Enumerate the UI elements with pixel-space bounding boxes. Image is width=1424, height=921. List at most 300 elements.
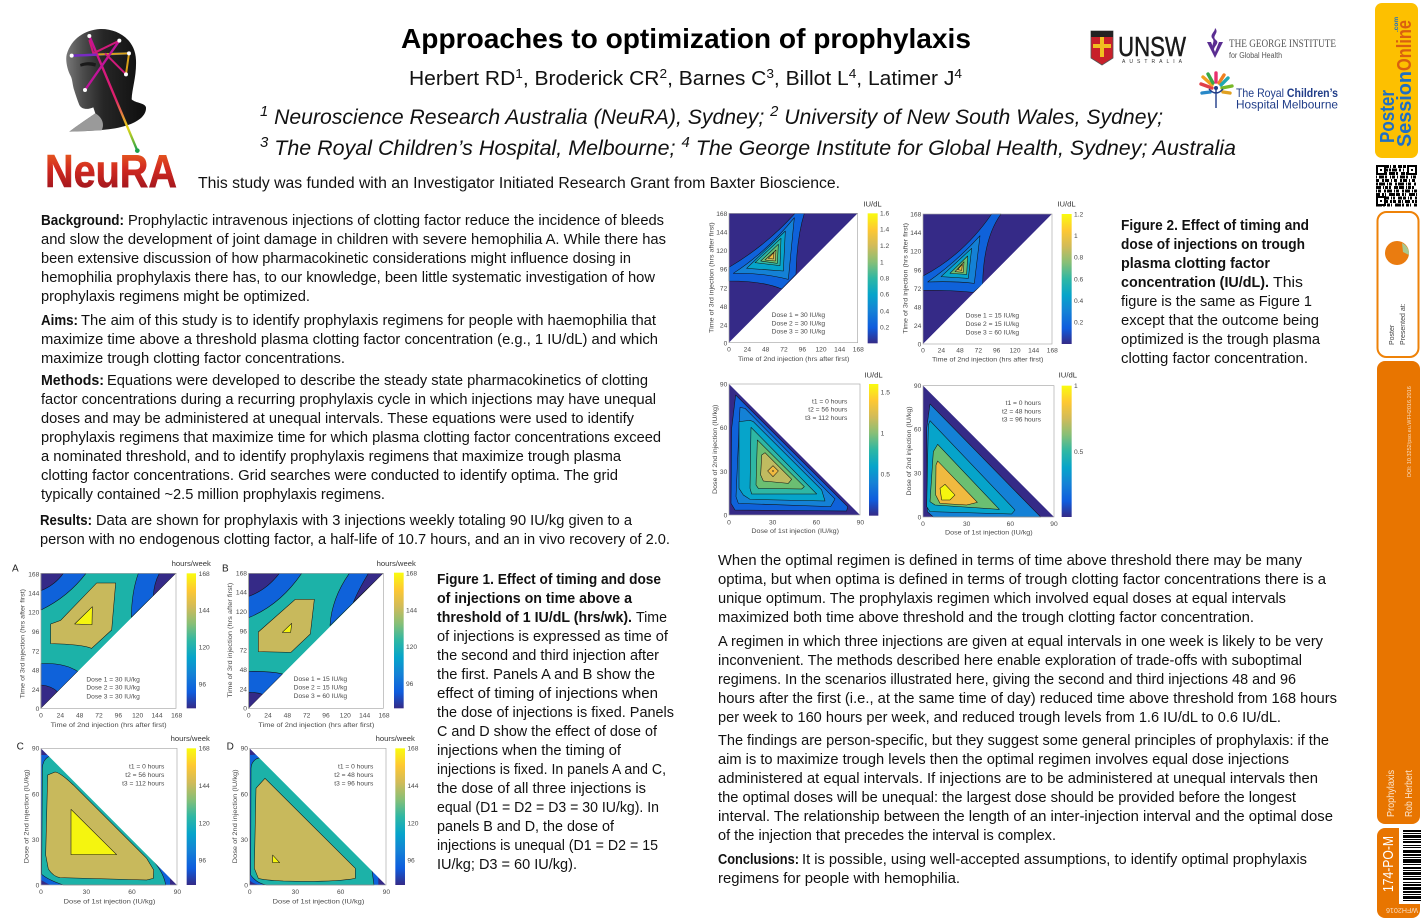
affiliations: 4 <box>681 134 690 151</box>
logo: UNSW: UNSW <box>1118 31 1186 62</box>
text block: discussion paragraph 1 <box>718 553 1327 626</box>
chart: trough panel timing equal dose: Time of 2nd injection (hrs after first) <box>738 356 849 363</box>
chart: panel C: 30 <box>32 837 40 844</box>
chart: panel C: t1 = 0 hours <box>129 764 165 771</box>
chart: panel D: 30 <box>292 889 299 896</box>
text block: discussion paragraph 1: When the optimal regimen is defined in terms of time above threshold there may be many <box>718 553 1303 569</box>
chart: trough panel timing equal dose: 0.6 <box>880 292 890 299</box>
chart: panel B: Time of 3rd injection (hrs after first) <box>227 583 234 698</box>
text block: methods: Methods: <box>41 373 104 389</box>
chart: trough panel timing unequal dose: 0 <box>918 342 922 349</box>
affiliations: Neuroscience Research Australia (NeuRA), Sydney; <box>268 105 770 129</box>
chart: trough panel timing equal dose: 1.6 <box>880 211 890 218</box>
sidebar: poster number and barcode: WFH2016 <box>1386 906 1418 913</box>
chart: trough panel dose unequal dose: 90 <box>1050 521 1058 528</box>
text block: methods: a nominated threshold, and to identify prophylaxis regimens that maximize trough plasma <box>41 449 622 465</box>
chart: trough panel dose unequal dose: Dose of 1st injection (IU/kg) <box>945 530 1033 537</box>
text block: figure 1 caption: C and D show the effect of dose of <box>437 724 658 740</box>
chart: panel B: 0 <box>247 712 251 719</box>
chart: panel C: 120 <box>199 820 210 827</box>
chart: trough panel dose unequal dose: 0.5 <box>1074 449 1084 456</box>
authors: Herbert RD <box>409 68 510 90</box>
logo: The George Institute: for Global Health <box>1229 51 1282 60</box>
chart: trough panel timing equal dose: 144 <box>716 229 728 236</box>
sidebar: poster number and barcode <box>1377 828 1423 918</box>
chart: panel B: 120 <box>406 644 417 651</box>
chart: trough panel timing unequal dose: 0.2 <box>1074 320 1084 327</box>
chart: trough panel timing equal dose: 144 <box>834 347 846 354</box>
text block: discussion paragraph 3: The findings are person-specific, but they suggest some general principles of prophylaxis: if the <box>718 733 1329 749</box>
sidebar: QR code <box>1376 165 1417 206</box>
funding note: This study was funded with an Investigator Initiated Research Grant from Baxter Bioscience. <box>198 175 840 192</box>
chart: trough panel dose unequal dose: 90 <box>914 383 922 390</box>
chart: panel C: C <box>17 741 24 752</box>
chart: panel B: 48 <box>240 667 247 674</box>
chart: panel B: Dose 1 = 15 IU/kg <box>294 676 347 683</box>
chart: panel B: 96 <box>406 681 414 688</box>
text block: methods: prophylaxis regimens that maximize time for which plasma clotting factor concentrations exceed <box>41 430 661 446</box>
chart: panel A: 120 <box>132 712 144 719</box>
sidebar: PosterSessionOnline banner: Online <box>1394 20 1416 71</box>
authors: 2 <box>659 66 667 81</box>
chart: panel B: B <box>222 564 229 575</box>
text block: background: been extensive discussion of how pharmacokinetic considerations might influence dosing in <box>41 251 631 267</box>
logo: The George Institute: THE GEORGE INSTITUTE <box>1229 36 1336 50</box>
text block: results: Data are shown for prophylaxis with 3 injections weekly totaling 90 IU/kg given to a <box>96 513 633 529</box>
sidebar: presented-at box <box>1378 212 1418 357</box>
chart: trough panel timing equal dose: IU/dL <box>863 200 882 209</box>
logo: NeuRA <box>45 29 177 197</box>
sidebar: orange info panel: Prophylaxis <box>1385 770 1397 817</box>
chart: panel A: 168 <box>28 571 40 578</box>
affiliations: 1 <box>260 103 268 120</box>
chart: panel C: 90 <box>174 889 181 896</box>
chart: panel A: 120 <box>199 645 210 652</box>
chart: trough panel timing equal dose: 72 <box>780 347 788 354</box>
chart: trough panel timing unequal dose: 144 <box>1028 347 1040 354</box>
text block: aims: maximize trough clotting factor concentrations. <box>41 351 345 367</box>
chart: panel A: A <box>12 564 19 575</box>
logo: NeuRA: NeuRA <box>45 145 177 197</box>
text block: methods: doses and may be administered at unequal intervals. These equations were used to identify <box>41 411 635 427</box>
chart: trough panel timing equal dose: 1 <box>880 259 884 266</box>
chart: panel A: 72 <box>95 712 103 719</box>
chart: trough panel dose equal intervals: Dose of 1st injection (IU/kg) <box>751 528 839 535</box>
chart: trough panel timing unequal dose: 96 <box>914 267 922 274</box>
text block: figure 2 caption: clotting factor concentration. <box>1121 351 1308 367</box>
text block: figure 1 caption: equal (D1 = D2 = D3 = 30 IU/kg). In <box>437 800 659 816</box>
text block: discussion paragraph 3 <box>718 733 1333 844</box>
text block: discussion paragraph 3: the optimal doses will be unequal: the largest dose should be provided before the longest <box>718 790 1296 806</box>
authors: 4 <box>954 66 962 81</box>
chart: trough panel timing equal dose: 24 <box>744 347 751 354</box>
chart: trough panel timing unequal dose: 120 <box>910 249 922 256</box>
chart: trough panel timing unequal dose: Dose 2 = 15 IU/kg <box>966 321 1019 328</box>
chart: panel A: Time of 2nd injection (hrs after first) <box>51 722 167 729</box>
affiliations: University of New South Wales, Sydney; <box>778 105 1163 129</box>
text block: figure 2 caption: optimized is the trough plasma <box>1121 332 1321 348</box>
chart: trough panel dose equal intervals: 30 <box>720 469 728 476</box>
chart: panel D: 96 <box>407 858 415 865</box>
chart group: figure 2 <box>708 200 1084 537</box>
chart: panel A: Dose 3 = 30 IU/kg <box>86 693 140 700</box>
text block: discussion paragraph 3: of the injection that precedes the interval is complex. <box>718 828 1056 844</box>
text block: aims: Aims: <box>41 313 78 329</box>
chart: panel D: D <box>227 741 234 752</box>
chart: trough panel timing equal dose <box>708 200 890 363</box>
chart: trough panel timing unequal dose: IU/dL <box>1057 200 1076 209</box>
chart: trough panel timing equal dose: 0.8 <box>880 276 890 283</box>
chart: panel C: 168 <box>199 746 210 753</box>
text block: figure 1 caption: IU/kg; D3 = 60 IU/kg). <box>437 857 577 873</box>
chart: trough panel dose equal intervals: IU/dL <box>864 371 883 380</box>
text block: figure 1 caption <box>437 572 674 873</box>
chart: trough panel dose unequal dose: Dose of 2nd injection (IU/kg) <box>906 406 913 496</box>
text block: conclusions <box>718 852 1307 887</box>
chart: trough panel timing equal dose: 96 <box>720 267 728 274</box>
chart: trough panel dose unequal dose <box>906 371 1084 537</box>
affiliations: The George Institute for Global Health, Sydney; Australia <box>690 136 1236 160</box>
chart: panel B: 144 <box>406 607 417 614</box>
chart: trough panel timing unequal dose: Time of 3rd injection (hrs after first) <box>902 223 909 334</box>
chart: trough panel dose unequal dose: 60 <box>914 427 922 434</box>
chart: trough panel dose unequal dose: 30 <box>963 521 971 528</box>
chart: panel B: 72 <box>303 712 311 719</box>
chart: panel A: 48 <box>32 668 40 675</box>
text block: results: Results: <box>40 513 92 529</box>
chart: panel A <box>12 559 211 729</box>
chart: panel A: 72 <box>32 648 40 655</box>
chart group: figure 1 <box>12 559 419 906</box>
chart: trough panel dose equal intervals: 0 <box>727 519 731 526</box>
chart: trough panel dose unequal dose: t3 = 96 hours <box>1002 417 1042 424</box>
text block: figure 1 caption: injections is fixed. In panels A and C, <box>437 762 666 778</box>
chart: panel B: Time of 2nd injection (hrs after first) <box>258 722 374 729</box>
text block: figure 1 caption: Figure 1. Effect of timing and dose <box>437 572 661 588</box>
chart: panel A: hours/week <box>172 559 211 568</box>
chart: trough panel dose equal intervals <box>712 371 890 535</box>
affiliations: 2 <box>769 103 779 120</box>
chart: trough panel dose unequal dose: IU/dL <box>1059 371 1077 380</box>
chart: panel D: t3 = 96 hours <box>334 781 374 788</box>
chart: panel C: Dose of 1st injection (IU/kg) <box>64 899 155 906</box>
chart: panel D: Dose of 1st injection (IU/kg) <box>273 899 364 906</box>
text block: background: Background: <box>41 213 124 229</box>
chart: trough panel timing equal dose: 48 <box>762 347 770 354</box>
chart: panel A: Dose 2 = 30 IU/kg <box>86 685 140 692</box>
chart: panel C: 0 <box>36 883 40 890</box>
text block: figure 2 caption: figure is the same as Figure 1 <box>1121 294 1312 310</box>
affiliations: The Royal Children’s Hospital, Melbourne; <box>268 136 681 160</box>
chart: trough panel dose unequal dose: 1 <box>1074 383 1078 390</box>
chart: panel B: 168 <box>406 570 417 577</box>
authors: 3 <box>766 66 774 81</box>
title: Approaches to optimization of prophylaxis <box>401 23 971 54</box>
text block: discussion paragraph 2: per week to 160 hours per week, and reduced trough levels from 1.6 IU/dL to 0.6 IU/dL. <box>718 710 1281 726</box>
chart: panel B: hours/week <box>377 559 416 568</box>
chart: trough panel timing equal dose: Dose 1 = 30 IU/kg <box>772 312 825 319</box>
text block: figure 1 caption: the dose of injections is fixed. Panels <box>437 705 674 721</box>
chart: panel A: 48 <box>76 712 84 719</box>
chart: trough panel dose equal intervals: 60 <box>813 519 820 526</box>
text block: figure 1 caption: of injections on time above a <box>437 591 633 607</box>
chart: trough panel timing equal dose: 96 <box>799 347 806 354</box>
chart: panel A: 168 <box>171 712 183 719</box>
chart: trough panel dose equal intervals: 0.5 <box>881 472 890 479</box>
text block: figure 1 caption: effect of timing of injections when <box>437 686 658 702</box>
sidebar: presented-at box: Poster <box>1389 324 1396 345</box>
chart: trough panel timing unequal dose: 168 <box>1047 347 1058 354</box>
text block: methods: clotting factor concentrations. Grid searches were conducted to identify optima. The grid <box>41 468 618 484</box>
text block: figure 1 caption: threshold of 1 IU/dL (hrs/wk). <box>437 610 632 626</box>
sidebar: orange info panel: DOI: 10.3252/pso.eu.WFH2016.2016 <box>1407 386 1413 477</box>
text block: figure 1 caption: Time <box>636 610 667 626</box>
text block: aims: The aim of this study is to identify prophylaxis regimens for people with haemophilia that <box>81 313 656 329</box>
chart: trough panel dose equal intervals: t2 = 56 hours <box>808 407 848 414</box>
chart: panel B: 144 <box>236 590 247 597</box>
chart: panel C: hours/week <box>171 734 210 743</box>
chart: panel B: 168 <box>378 712 390 719</box>
chart: panel D: 168 <box>407 746 419 753</box>
chart: panel B: 24 <box>264 712 272 719</box>
text block: figure 2 caption: This <box>1273 275 1303 291</box>
chart: panel C: 60 <box>32 791 40 798</box>
authors: 4 <box>849 66 856 81</box>
chart: panel C: t3 = 112 hours <box>122 781 165 788</box>
chart: trough panel timing equal dose: 0.2 <box>880 325 890 332</box>
chart: trough panel timing unequal dose: 1 <box>1074 233 1078 240</box>
chart: panel D: t2 = 48 hours <box>334 772 374 779</box>
sidebar: PosterSessionOnline banner: Session <box>1394 71 1416 147</box>
chart: panel D: t1 = 0 hours <box>338 764 374 771</box>
text block: figure 2 caption: concentration (IU/dL). <box>1121 275 1269 291</box>
chart: panel A: 144 <box>151 712 163 719</box>
text block: methods <box>41 373 661 503</box>
chart: trough panel timing unequal dose: 0 <box>921 347 925 354</box>
text block: discussion paragraph 1: unique optimum. The prophylaxis regimen which involved equal doses at equal intervals <box>718 591 1286 607</box>
chart: trough panel timing equal dose: 72 <box>720 285 728 292</box>
icon: head silhouette with coloured network <box>66 29 146 153</box>
text block: discussion paragraph 2: hours after the first (i.e., at the same time of day) reduced time above threshold from 168 hours <box>718 691 1337 707</box>
sidebar: PosterSessionOnline banner: .com <box>1393 17 1400 32</box>
chart: trough panel timing equal dose: 48 <box>720 304 728 311</box>
chart: trough panel timing unequal dose: Dose 3 = 60 IU/kg <box>966 329 1019 336</box>
chart: trough panel timing equal dose: 0.4 <box>880 308 890 315</box>
chart: panel A: 144 <box>199 608 210 615</box>
chart: trough panel timing unequal dose: 24 <box>914 323 922 330</box>
chart: trough panel dose equal intervals: t3 = 112 hours <box>805 415 848 422</box>
chart: trough panel dose unequal dose: 0 <box>918 514 922 521</box>
chart: trough panel timing unequal dose: Time of 2nd injection (hrs after first) <box>932 357 1043 364</box>
chart: trough panel timing equal dose: 0 <box>727 347 731 354</box>
chart: trough panel dose equal intervals: 0 <box>724 513 728 520</box>
chart: trough panel timing unequal dose: 0.8 <box>1074 255 1084 262</box>
text block: discussion paragraph 3: interval. The relationship between the length of an inter-injection interval and the optimal dose <box>718 809 1333 825</box>
logo: The George Institute <box>1207 28 1336 60</box>
text block: discussion paragraph 3: administered at equal intervals. If injections are to be administered at unequal intervals then <box>718 771 1318 787</box>
text block: background: and slow the development of joint damage in children with severe hemophilia A. While there has <box>41 232 666 248</box>
sidebar: PosterSessionOnline banner <box>1375 3 1418 158</box>
chart: panel A: 144 <box>28 590 40 597</box>
text block: figure 2 caption: except that the outcome being <box>1121 313 1319 329</box>
chart: panel B: 120 <box>340 712 351 719</box>
chart: panel D: 60 <box>337 889 345 896</box>
chart: trough panel timing equal dose: 120 <box>716 248 728 255</box>
logo: UNSW: AUSTRALIA <box>1122 59 1183 65</box>
chart: panel D: hours/week <box>376 734 415 743</box>
chart: trough panel dose equal intervals: 90 <box>857 519 864 526</box>
chart: trough panel timing equal dose: Time of 3rd injection (hrs after first) <box>708 222 715 333</box>
chart: panel A: 120 <box>28 610 40 617</box>
chart: trough panel timing unequal dose: 72 <box>975 347 982 354</box>
chart: panel A: Time of 3rd injection (hrs after first) <box>19 589 26 698</box>
chart: panel A: 168 <box>199 571 210 578</box>
text block: background: prophylaxis regimens might be optimized. <box>41 289 310 305</box>
chart: panel B: 96 <box>322 712 330 719</box>
chart: panel D: Dose of 2nd injection (IU/kg) <box>232 769 239 863</box>
text block: figure 1 caption: the first. Panels A and B show the <box>437 667 655 683</box>
authors: , Broderick CR <box>523 68 659 90</box>
text block: figure 2 caption: plasma clotting factor <box>1121 256 1270 272</box>
text block: aims <box>41 313 658 367</box>
chart: panel A: 0 <box>36 706 40 713</box>
chart: trough panel dose equal intervals: 30 <box>769 519 777 526</box>
chart: panel C <box>17 734 210 906</box>
chart: panel A: 24 <box>57 712 64 719</box>
text block: methods: factor concentrations during a recurring prophylaxis cycle in which injections may have unequal <box>41 392 656 408</box>
text block: background <box>41 213 666 305</box>
chart: trough panel dose equal intervals: 60 <box>720 425 728 432</box>
chart: panel D: 120 <box>407 820 419 827</box>
chart: panel C: 144 <box>199 783 210 790</box>
chart: trough panel timing equal dose: 168 <box>853 347 864 354</box>
chart: trough panel timing unequal dose: 1.2 <box>1074 211 1084 218</box>
chart: panel C: Dose of 2nd injection (IU/kg) <box>23 769 30 863</box>
chart: trough panel dose equal intervals: t1 = 0 hours <box>812 399 848 406</box>
text block: figure 1 caption: injections when the timing of <box>437 743 622 759</box>
sidebar: PosterSessionOnline banner: Poster <box>1377 90 1399 143</box>
chart: trough panel timing equal dose: 24 <box>720 322 728 329</box>
chart: trough panel timing equal dose: 1.2 <box>880 243 890 250</box>
chart: panel B: 168 <box>236 571 247 578</box>
chart: panel D <box>227 734 419 906</box>
chart: panel A: 24 <box>32 687 40 694</box>
logo: The Royal Children's Hospital Melbourne: Hospital Melbourne <box>1236 98 1338 112</box>
affiliations: 3 <box>260 134 269 151</box>
authors: , Billot L <box>774 68 849 90</box>
text block: results: person with no endogenous clotting factor, a half-life of 10.7 hours, and an in vivo recovery of 2.0. <box>40 532 670 548</box>
chart: panel D: 0 <box>244 883 248 890</box>
chart: panel A: Dose 1 = 30 IU/kg <box>86 676 140 683</box>
text block: results <box>40 513 670 548</box>
affiliations <box>260 103 1236 160</box>
chart: trough panel timing unequal dose: 0.6 <box>1074 277 1084 284</box>
text block: discussion paragraph 2: A regimen in which three injections are given at equal intervals in one week is likely to be very <box>718 634 1324 650</box>
text block: figure 1 caption: the second and third injection after <box>437 648 659 664</box>
chart: panel B: 0 <box>243 706 247 713</box>
chart: trough panel timing equal dose: Dose 3 = 30 IU/kg <box>772 329 825 336</box>
text block: figure 1 caption: injections is unequal (D1 = D2 = 15 <box>437 838 658 854</box>
chart: panel B: Dose 3 = 60 IU/kg <box>294 693 347 700</box>
chart: panel C: 30 <box>83 889 90 896</box>
chart: panel C: 96 <box>199 858 206 865</box>
chart: trough panel timing unequal dose: 144 <box>910 230 922 237</box>
chart: panel C: 0 <box>39 889 43 896</box>
logo: UNSW <box>1091 31 1186 65</box>
text block: figure 1 caption: panels B and D, the dose of <box>437 819 615 835</box>
chart: panel B: 48 <box>284 712 291 719</box>
text block: conclusions: regimens for people with hemophilia. <box>718 871 960 887</box>
text block: conclusions: Conclusions: <box>718 852 799 868</box>
chart: trough panel dose equal intervals: 1 <box>881 431 885 438</box>
chart: trough panel timing unequal dose: 0.4 <box>1074 298 1084 305</box>
text block: discussion paragraph 1: optima, but when optima is defined in terms of trough clotting factor concentrations there is a <box>718 572 1327 588</box>
chart: panel B: Dose 2 = 15 IU/kg <box>294 684 347 691</box>
chart: panel D: 30 <box>241 837 248 844</box>
chart: trough panel timing unequal dose: 48 <box>914 304 922 311</box>
chart: panel D: 60 <box>241 791 248 798</box>
logo: The Royal Children's Hospital Melbourne <box>1201 73 1338 112</box>
text block: discussion paragraph 1: maximized both time above threshold and the trough clotting factor concentration. <box>718 610 1254 626</box>
chart: trough panel dose unequal dose: 0 <box>921 521 925 528</box>
authors: 1 <box>515 66 523 81</box>
chart: trough panel timing equal dose: 0 <box>724 341 728 348</box>
chart: trough panel timing unequal dose: 48 <box>956 347 964 354</box>
chart: trough panel timing unequal dose: 24 <box>938 347 945 354</box>
text block: figure 2 caption <box>1121 218 1321 367</box>
chart: trough panel dose equal intervals: 90 <box>720 381 728 388</box>
text block: discussion paragraph 3: aim is to maximize trough levels then the optimal regimen involves equal dose injections <box>718 752 1289 768</box>
chart: trough panel timing equal dose: 168 <box>716 211 728 218</box>
chart: panel A: 0 <box>39 712 43 719</box>
text block: figure 2 caption: dose of injections on trough <box>1121 237 1305 253</box>
sidebar: poster number and barcode: 174-PO-M <box>1380 836 1397 892</box>
chart: panel B: 24 <box>240 686 247 693</box>
text block: discussion paragraph 2: regimens. In the scenarios illustrated here, giving the second and third injections 48 and 96 <box>718 672 1296 688</box>
chart: trough panel timing unequal dose: Dose 1 = 15 IU/kg <box>966 313 1019 320</box>
text block: discussion paragraph 2 <box>718 634 1337 726</box>
authors: , Barnes C <box>667 68 766 90</box>
text block: figure 2 caption: Figure 2. Effect of timing and <box>1121 218 1309 234</box>
logo: The Royal Children's Hospital Melbourne: The Royal Children’s <box>1236 86 1338 100</box>
sidebar: orange info panel <box>1377 361 1420 824</box>
chart: trough panel timing unequal dose: 168 <box>910 212 922 219</box>
chart: panel C: t2 = 56 hours <box>125 772 165 779</box>
chart: panel D: 90 <box>241 746 248 753</box>
chart: panel D: 144 <box>407 783 419 790</box>
chart: panel D: 0 <box>248 889 252 896</box>
text block: methods: Equations were developed to describe the steady state pharmacokinetics of clotting <box>107 373 648 389</box>
chart: panel B <box>222 559 417 729</box>
chart: panel C: 90 <box>32 746 40 753</box>
chart: trough panel dose equal intervals: 1.5 <box>881 389 890 396</box>
text block: aims: maximize time above a threshold plasma clotting factor concentration (e.g., 1 IU/dL) and which <box>41 332 658 348</box>
chart: trough panel dose unequal dose: t1 = 0 hours <box>1006 400 1042 407</box>
chart: panel B: 96 <box>240 628 247 635</box>
chart: trough panel dose unequal dose: t2 = 48 hours <box>1002 408 1042 415</box>
chart: trough panel timing equal dose: Dose 2 = 30 IU/kg <box>772 320 825 327</box>
chart: panel D: 90 <box>383 889 390 896</box>
text block: background: hemophilia prophylaxis there has, to our knowledge, been little systematic investigation of how <box>41 270 656 286</box>
chart: trough panel dose unequal dose: 60 <box>1007 521 1014 528</box>
chart: panel A: 96 <box>115 712 122 719</box>
chart: trough panel dose equal intervals: Dose of 2nd injection (IU/kg) <box>712 405 719 494</box>
chart: panel B: 144 <box>359 712 371 719</box>
chart: panel A: 96 <box>199 681 206 688</box>
chart: panel A: 96 <box>32 629 40 636</box>
chart: trough panel timing equal dose: 1.4 <box>880 227 890 234</box>
text block: figure 1 caption: of injections is expressed as time of <box>437 629 669 645</box>
